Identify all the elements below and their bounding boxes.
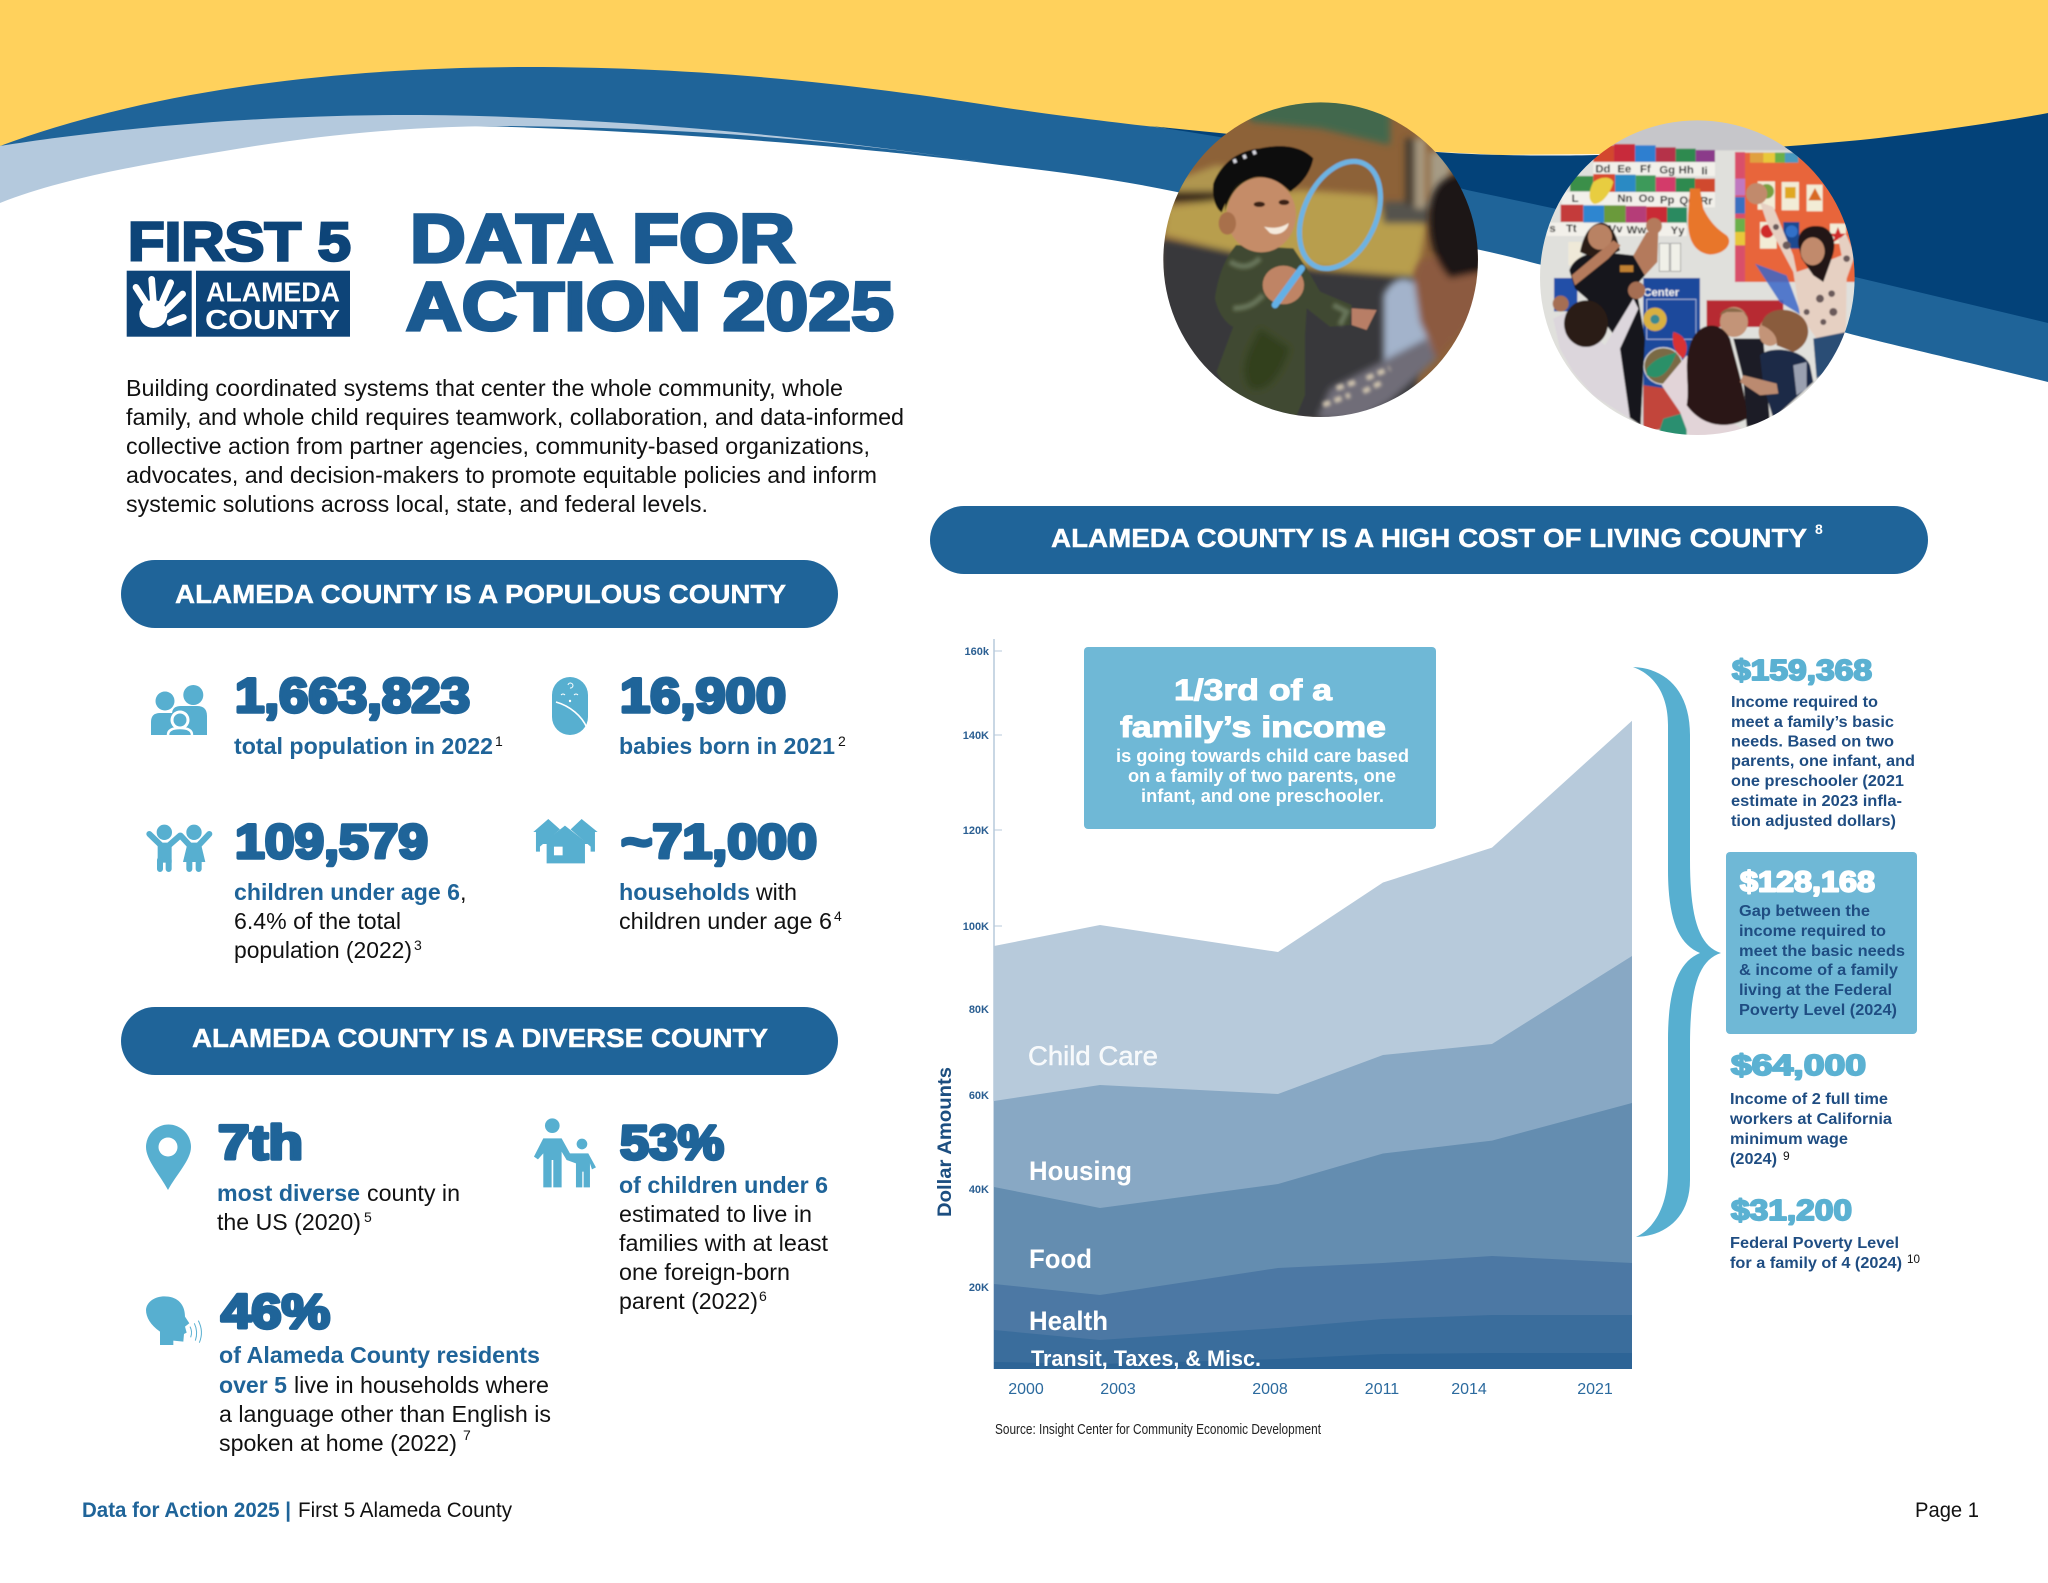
stat: 46 percent: 46% (221, 1286, 330, 1339)
pill heading: high cost of living: 8 (1815, 521, 1823, 537)
stat: babies born (552, 670, 846, 759)
area labels: Health (1029, 1306, 1108, 1336)
x axis years (1008, 1381, 1613, 1398)
figure: 64,000: minimum wage (1730, 1131, 1848, 1148)
icon: speaking head (146, 1296, 201, 1345)
y axis with ticks: 140K (963, 730, 989, 742)
pill heading: diverse county: ALAMEDA COUNTY IS A DIVERSE COUNTY (192, 1023, 768, 1053)
area labels: Child Care (1028, 1041, 1158, 1071)
stat: households: households (619, 879, 750, 905)
alphabet chart on the classroom wall (1547, 144, 1715, 271)
alphabet chart on the classroom wall: Ee (1617, 164, 1631, 176)
figure: 159,368: $159,368 (1732, 655, 1872, 687)
figure: 159,368: Income required to (1731, 694, 1878, 711)
intro paragraph: advocates, and decision-makers to promote equitable policies and inform (126, 462, 877, 488)
figure: 64,000: workers at California (1729, 1111, 1892, 1128)
area labels: Housing (1029, 1156, 1132, 1186)
pill heading: high cost of living (930, 506, 1928, 574)
footer left (82, 1499, 512, 1522)
figure: 159,368: estimate in 2023 infla- (1731, 793, 1902, 810)
stat: households: ~71,000 (621, 816, 817, 869)
highlighted figure: 128,168 gap: Poverty Level (2024) (1739, 1002, 1897, 1019)
pill heading: high cost of living: ALAMEDA COUNTY IS A HIGH COST OF LIVING COUNTY (1051, 523, 1807, 553)
x axis years: 2014 (1451, 1381, 1487, 1398)
stat: most diverse: county in (367, 1180, 460, 1206)
y axis with ticks: 80K (969, 1004, 989, 1016)
icon: two children (149, 825, 209, 869)
stat: most diverse: most diverse (217, 1180, 360, 1206)
x axis years: 2021 (1577, 1381, 1613, 1398)
intro paragraph: collective action from partner agencies, community-based organizations, (126, 433, 870, 459)
figure: 159,368: parents, one infant, and (1731, 753, 1915, 770)
stat: 53 percent: 6 (759, 1288, 767, 1304)
figure: 159,368: one preschooler (2021 (1731, 773, 1904, 790)
curly brace (1633, 667, 1721, 1237)
stat: most diverse (146, 1117, 460, 1235)
footer left: Data for Action 2025 | (82, 1499, 291, 1522)
icon: parent and child (534, 1118, 596, 1188)
highlighted figure: 128,168 gap: Gap between the (1739, 903, 1870, 920)
figure: 31,200: 10 (1907, 1252, 1920, 1266)
area labels: Food (1029, 1244, 1092, 1274)
alphabet chart on the classroom wall: Gg (1659, 164, 1675, 176)
title: ACTION 2025 (406, 268, 894, 345)
stat: children under 6: children under age 6 (234, 879, 460, 905)
alphabet chart on the classroom wall: Pp (1660, 194, 1675, 206)
orange shapes board (1735, 152, 1860, 282)
y axis with ticks (963, 639, 1002, 1369)
stat: 53 percent: estimated to live in (619, 1201, 812, 1227)
footer page number: Page 1 (1915, 1499, 1979, 1522)
stat: babies born: 16,900 (620, 670, 786, 723)
children reaching up (1553, 282, 1813, 439)
area: health (994, 1256, 1632, 1369)
stat: most diverse: 5 (364, 1209, 372, 1225)
blue classroom posters: Center (1643, 287, 1680, 299)
highlighted figure: 128,168 gap: living at the Federal (1739, 982, 1892, 999)
figure: 31,200: for a family of 4 (2024) (1730, 1255, 1902, 1272)
stat: babies born: 2 (838, 733, 846, 749)
y axis with ticks: 40K (969, 1184, 989, 1196)
highlighted figure: 128,168 gap: $128,168 (1740, 866, 1875, 898)
figure: 31,200: $31,200 (1731, 1195, 1852, 1227)
alphabet chart on the classroom wall: Dd (1595, 164, 1611, 176)
alphabet chart on the classroom wall: Hh (1679, 164, 1694, 176)
alphabet chart on the classroom wall: Qq (1679, 195, 1695, 207)
callout: one third of income: infant, and one preschooler. (1141, 786, 1384, 806)
stat: 46 percent (146, 1286, 551, 1456)
title (406, 200, 894, 345)
callout: one third of income: family’s income (1120, 711, 1386, 744)
icon: map pin (146, 1125, 191, 1190)
stat: 46 percent: over 5 (219, 1372, 287, 1398)
pill heading: populous county: ALAMEDA COUNTY IS A POPULOUS COUNTY (175, 579, 786, 609)
area: bottom band (994, 1353, 1632, 1369)
figure: 159,368: meet a family’s basic (1731, 714, 1894, 731)
pill heading: diverse county (121, 1007, 838, 1075)
area: food (994, 1103, 1632, 1369)
header wave background (0, 0, 2048, 382)
stat: total population (151, 670, 503, 759)
stat: households: with (755, 879, 797, 905)
figure: 64,000: $64,000 (1731, 1050, 1866, 1082)
figure: 159,368: tion adjusted dollars) (1731, 813, 1896, 830)
alphabet chart on the classroom wall: Nn (1617, 193, 1633, 205)
logo: First 5 Alameda County: COUNTY (205, 304, 340, 335)
x axis years: 2000 (1008, 1381, 1044, 1398)
y axis with ticks: 100K (963, 921, 989, 933)
stat: total population: 1,663,823 (235, 670, 470, 723)
teacher in black shirt (1569, 218, 1662, 425)
stat: 53 percent: one foreign-born (619, 1259, 790, 1285)
logo: First 5 Alameda County: FIRST 5 (128, 210, 351, 272)
stat: total population: total population in 2022 (234, 733, 493, 759)
highlighted figure: 128,168 gap: meet the basic needs (1739, 943, 1905, 960)
y axis with ticks: 60K (969, 1090, 989, 1102)
stat: 46 percent: live in households where (294, 1372, 549, 1398)
alphabet chart on the classroom wall: s (1549, 223, 1556, 235)
axis title: Dollar Amounts (935, 1067, 956, 1217)
alphabet chart on the classroom wall: Vv (1609, 224, 1623, 236)
stat: children under 6: 3 (414, 937, 422, 953)
stat: households: children under age 6 (619, 908, 832, 934)
area: child care (994, 721, 1632, 1369)
stat: children under 6 (149, 816, 467, 963)
alphabet chart on the classroom wall: Ww (1627, 224, 1646, 236)
callout: one third of income: on a family of two parents, one (1128, 766, 1396, 786)
intro paragraph (126, 375, 904, 517)
x axis years: 2008 (1252, 1381, 1288, 1398)
callout: one third of income: 1/3rd of a (1174, 674, 1332, 707)
stat: babies born: babies born in 2021 (619, 733, 835, 759)
photo: classroom with teachers and children (1537, 117, 1860, 440)
stat: 46 percent: a language other than English is (219, 1401, 551, 1427)
x axis years: 2011 (1365, 1381, 1399, 1398)
stat: 46 percent: spoken at home (2022) (219, 1430, 457, 1456)
area labels (1028, 1041, 1261, 1371)
y axis with ticks: 120K (963, 825, 989, 837)
footer left: First 5 Alameda County (298, 1499, 512, 1522)
figure: 159,368: needs. Based on two (1731, 734, 1894, 750)
figure: 31,200 (1730, 1195, 1920, 1272)
stat: 46 percent: of Alameda County residents (219, 1342, 540, 1368)
stat: 46 percent: 7 (463, 1427, 471, 1443)
photo: boy with bubble wand (1160, 95, 1483, 422)
area labels: Transit, Taxes, & Misc. (1031, 1346, 1261, 1371)
logo: First 5 Alameda County (127, 210, 351, 337)
stat: children under 6: 6.4% of the total (234, 908, 401, 934)
intro paragraph: family, and whole child requires teamwork, collaboration, and data-informed (126, 404, 904, 430)
alphabet chart on the classroom wall: Tt (1566, 223, 1577, 235)
figure: 64,000 (1729, 1050, 1892, 1168)
stat: 53 percent: families with at least (619, 1230, 828, 1256)
figure: 64,000: Income of 2 full time (1730, 1091, 1888, 1108)
icon: houses (533, 819, 598, 863)
chart: basic needs stacked area (935, 639, 1632, 1438)
figure: 64,000: (2024) (1730, 1151, 1777, 1168)
icon: family (151, 685, 207, 735)
stat: children under 6: population (2022) (234, 937, 412, 963)
figure: 159,368 (1731, 655, 1915, 830)
stat: 53 percent: 53% (620, 1117, 724, 1170)
title: DATA FOR (410, 200, 795, 277)
stat: total population: 1 (495, 733, 503, 749)
stat: most diverse: the US (2020) (217, 1209, 361, 1235)
highlighted figure: 128,168 gap: & income of a family (1739, 962, 1898, 979)
x axis years: 2003 (1100, 1381, 1136, 1398)
area: housing (994, 956, 1632, 1369)
highlighted figure: 128,168 gap (1726, 852, 1917, 1034)
y axis with ticks: 20K (969, 1282, 989, 1294)
stat: households (533, 816, 842, 934)
stat: 53 percent: of children under 6 (619, 1172, 828, 1198)
intro paragraph: Building coordinated systems that center the whole community, whole (126, 375, 843, 401)
stat: 53 percent (534, 1117, 828, 1314)
area: transit, taxes and misc (994, 1315, 1632, 1369)
callout: one third of income: is going towards child care based (1116, 746, 1409, 766)
stat: most diverse: 7th (218, 1117, 303, 1170)
stat: children under 6: 109,579 (235, 816, 428, 869)
logo: First 5 Alameda County: ALAMEDA (206, 276, 340, 308)
y axis with ticks: 160k (965, 646, 990, 658)
alphabet chart on the classroom wall: Ii (1701, 166, 1708, 178)
alphabet chart on the classroom wall: Yy (1671, 225, 1685, 237)
icon: swaddled baby (552, 677, 588, 735)
pill heading: populous county (121, 560, 838, 628)
alphabet chart on the classroom wall: L (1572, 193, 1579, 205)
alphabet chart on the classroom wall: Oo (1639, 193, 1654, 205)
figure: 31,200: Federal Poverty Level (1730, 1235, 1899, 1252)
callout: one third of income (1084, 647, 1436, 829)
alphabet chart on the classroom wall: Rr (1700, 196, 1713, 208)
blue classroom posters (1554, 278, 1783, 439)
source: Source: Insight Center for Community Economic Development (995, 1422, 1321, 1438)
intro paragraph: systemic solutions across local, state, and federal levels. (126, 491, 708, 517)
stat: 53 percent: parent (2022) (619, 1288, 758, 1314)
teacher in patterned sweater (1746, 183, 1855, 379)
alphabet chart on the classroom wall: Ff (1640, 164, 1651, 176)
stat: children under 6: , (460, 879, 467, 905)
stat: households: 4 (834, 908, 842, 924)
highlighted figure: 128,168 gap: income required to (1739, 923, 1886, 940)
figure: 64,000: 9 (1783, 1149, 1790, 1163)
